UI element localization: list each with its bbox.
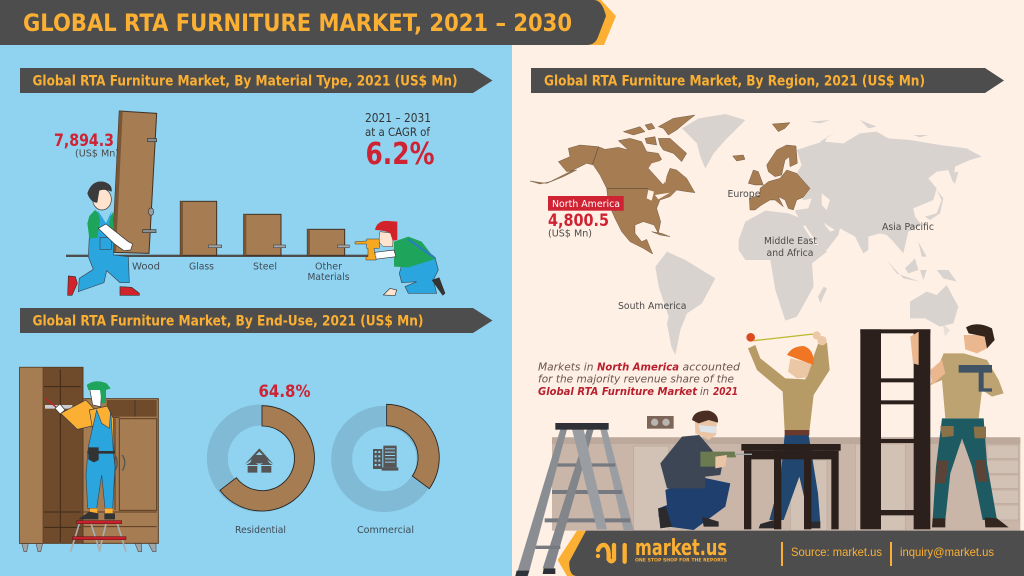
map: world	[530, 114, 982, 355]
panel: material type	[20, 68, 492, 296]
map labels: regions: Middle East	[764, 236, 817, 247]
lakes and borders	[593, 147, 670, 201]
labels: materials: Other	[315, 262, 343, 272]
icon: worker carrying door	[68, 181, 139, 295]
icon: kneeling man with drill	[649, 411, 752, 530]
labels: materials: Materials	[308, 272, 350, 283]
panel: region	[515, 68, 1024, 576]
map labels: regions: and Africa	[766, 248, 814, 259]
icon: man with tape measure	[746, 331, 830, 528]
map labels: regions: Asia Pacific	[882, 222, 934, 233]
bar chart: door bars by material	[66, 111, 373, 257]
text block: market summary: for the majority revenue share of the	[538, 372, 734, 386]
map labels: regions: Europe	[728, 189, 760, 200]
callout: CAGR	[365, 111, 434, 172]
chart: commercial donut	[342, 404, 439, 502]
kitchen backdrop	[552, 416, 1020, 531]
heading: end-use ribbon	[20, 308, 492, 333]
icon: ladder	[515, 423, 634, 576]
value: North America 4,800.5: 4,800.5	[548, 211, 609, 230]
icon: man with drill gun	[910, 324, 1009, 527]
text block: market summary: accounted	[682, 360, 741, 374]
bar: wood door	[112, 111, 157, 253]
bar: glass	[180, 201, 222, 255]
icon: house	[245, 448, 273, 473]
map labels: regions	[618, 189, 934, 312]
text block: market summary	[538, 360, 741, 398]
heading: material type ribbon	[20, 68, 492, 93]
divider lines and footer contact text: Source: market.us	[791, 545, 882, 559]
logo text: market.us	[635, 536, 727, 561]
callout: CAGR: 2021 – 2031	[365, 111, 431, 125]
bar: other materials	[307, 229, 349, 255]
bar: steel	[244, 214, 286, 255]
title banner: GLOBAL RTA FURNITURE MARKET, 2021 – 2030	[23, 9, 572, 37]
text block: market summary: North America	[597, 360, 679, 374]
title banner	[0, 0, 616, 45]
value: North America 4,800.5: (US$ Mn)	[548, 228, 592, 240]
divider lines and footer contact text	[781, 542, 994, 566]
panel: end-use	[20, 308, 492, 552]
text block: market summary: Global RTA Furniture Market	[538, 385, 698, 398]
logo text: ONE STOP SHOP FOR THE REPORTS	[635, 558, 727, 562]
map: Europe in brown	[748, 123, 810, 210]
callout: CAGR: at a CAGR of	[365, 125, 431, 139]
labels: materials: Glass	[189, 262, 214, 272]
map: Eurasia, Oceania in grey	[795, 120, 982, 337]
panel: right cream background	[512, 0, 1024, 576]
logo mark	[598, 545, 625, 562]
heading: end-use ribbon: Global RTA Furniture Market, By End-Use, 2021 (US$ Mn)	[32, 314, 424, 330]
icon: wardrobe with worker	[20, 367, 158, 552]
label: commercial: Commercial	[357, 525, 414, 536]
heading: region ribbon: Global RTA Furniture Market, By Region, 2021 (US$ Mn)	[544, 74, 925, 90]
divider lines and footer contact text: inquiry@market.us	[900, 545, 994, 559]
footer bar	[558, 531, 1024, 576]
chart: residential donut	[217, 406, 314, 511]
value: wood 7,894.3: (US$ Mn)	[75, 148, 119, 160]
seas: Caspian, Black Sea, Persian Gulf	[797, 193, 835, 245]
icon: table	[741, 444, 841, 529]
map labels: regions: South America	[618, 301, 686, 312]
badge: North America: North America	[552, 199, 620, 210]
heading: region ribbon	[531, 68, 1004, 93]
heading: material type ribbon: Global RTA Furniture Market, By Material Type, 2021 (US$ Mn)	[32, 74, 458, 90]
scene: furniture assembly	[515, 324, 1020, 576]
map: North America in brown	[530, 115, 745, 254]
labels: materials: Wood	[132, 262, 160, 272]
panel: left blue background	[0, 0, 512, 576]
icon: office building	[373, 446, 398, 471]
value: 64.8%: 64.8%	[258, 382, 310, 402]
icon: bookshelf	[860, 329, 930, 529]
value: North America 4,800.5	[548, 211, 609, 240]
icon: worker with drill	[355, 221, 445, 296]
value: wood 7,894.3: 7,894.3	[54, 131, 114, 150]
labels: materials: Steel	[253, 262, 277, 272]
value: wood 7,894.3	[54, 131, 119, 160]
text block: market summary: 2021	[713, 385, 738, 398]
callout: CAGR: 6.2%	[366, 137, 434, 172]
label: residential: Residential	[235, 525, 286, 536]
text block: market summary: in	[700, 385, 709, 398]
map: Africa, South America, Greenland in grey	[655, 114, 827, 355]
labels: materials	[132, 262, 350, 283]
text block: market summary: Markets in	[538, 360, 594, 374]
